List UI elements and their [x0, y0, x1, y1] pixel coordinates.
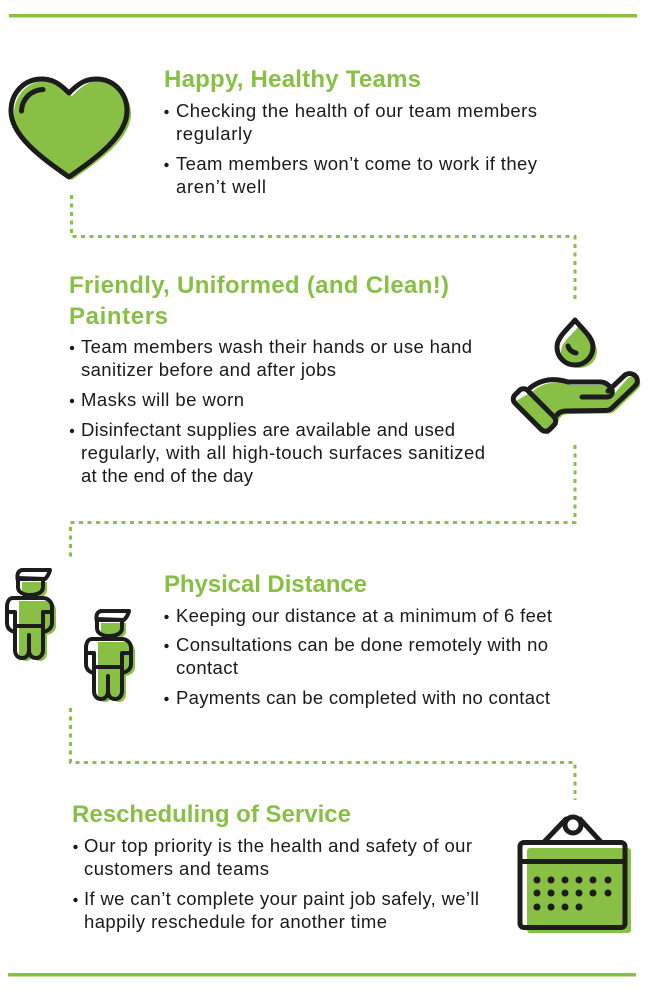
icon: heart [11, 79, 131, 180]
panel: happy healthy teams [11, 66, 538, 197]
bullet list [70, 336, 485, 486]
bullet list: Masks will be worn [81, 389, 244, 410]
bullet list: customers and teams [84, 858, 269, 879]
bullet list [73, 835, 479, 932]
bullet list: happily reschedule for another time [84, 911, 387, 932]
bullet list: sanitizer before and after jobs [81, 359, 336, 380]
panel: rescheduling of service [72, 801, 631, 933]
bullet list: Keeping our distance at a minimum of 6 feet [176, 605, 552, 626]
icon: water drop [557, 320, 597, 368]
dotted connector 2 [70, 445, 575, 557]
heading second line: Painters [69, 303, 168, 330]
panel: friendly uniformed painters [69, 272, 640, 486]
bullet list: contact [176, 657, 238, 678]
bullet list: regularly [176, 123, 253, 144]
panel: physical distance [7, 570, 552, 708]
icon: calendar [520, 817, 631, 933]
dotted connector 1 [72, 195, 575, 302]
icon: hand [511, 374, 640, 435]
bullet list: Team members wash their hands or use hand [81, 336, 472, 357]
top rule [9, 14, 637, 18]
bullet list: If we can’t complete your paint job safely, we’ll [84, 888, 479, 909]
heading: Friendly, Uniformed (and Clean!) [69, 272, 449, 299]
bullet list [164, 605, 552, 708]
bullet list: aren’t well [176, 176, 266, 197]
bullet list: Team members won’t come to work if they [176, 153, 538, 174]
bottom rule [8, 973, 636, 976]
bullet list: Disinfectant supplies are available and used [81, 419, 455, 440]
dotted connector 3 [70, 708, 575, 800]
bullet list: Consultations can be done remotely with no [176, 634, 548, 655]
bullet list [164, 100, 538, 197]
bullet list: regularly, with all high-touch surfaces sanitized [81, 442, 485, 463]
heading: Physical Distance [164, 571, 367, 598]
bullet list: Our top priority is the health and safety of our [84, 835, 472, 856]
bullet list: Payments can be completed with no contact [176, 687, 550, 708]
bullet list: at the end of the day [81, 465, 254, 486]
heading: Happy, Healthy Teams [164, 66, 421, 93]
icon: person right [86, 611, 135, 702]
heading: Rescheduling of Service [72, 801, 351, 828]
bullet list: Checking the health of our team members [176, 100, 537, 121]
icon: person left [7, 570, 56, 661]
